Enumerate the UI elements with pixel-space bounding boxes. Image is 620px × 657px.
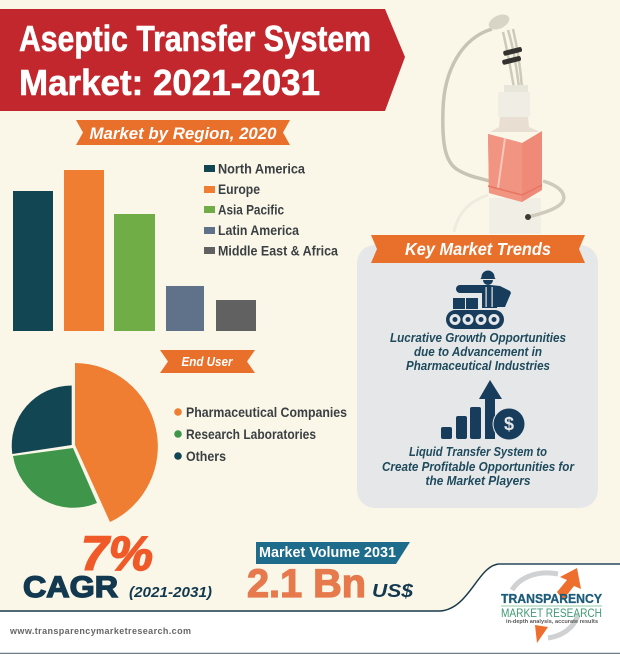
legend: end users: Pharmaceutical Companies [186, 404, 347, 420]
legend: regions: Latin America [218, 222, 299, 238]
bar chart: market by region [13, 170, 256, 331]
logo: transparency market research: TRANSPARENCY [501, 592, 603, 606]
text: trend one: Lucrative Growth Opportunities [390, 331, 566, 345]
text: trend two [382, 445, 575, 488]
market volume: Market Volume 2031 [259, 545, 396, 561]
footer white band [0, 564, 620, 657]
cagr value [23, 528, 212, 604]
panel: key market trends [357, 235, 598, 508]
title banner: Aseptic Transfer System [19, 18, 371, 59]
legend: regions: Europe [218, 181, 260, 197]
logo: transparency market research: in-depth analysis, accurate results [506, 619, 598, 625]
ribbon: key market trends: Key Market Trends [405, 239, 551, 259]
legend: end users: Research Laboratories [186, 426, 316, 442]
text: trend two: the Market Players [426, 474, 531, 488]
text: trend two: Create Profitable Opportunities for [382, 460, 575, 474]
logo: transparency market research: MARKET RESEARCH [501, 606, 602, 620]
legend: regions: North America [218, 160, 305, 176]
legend: end users [174, 404, 347, 464]
legend: regions: Middle East & Africa [218, 242, 338, 258]
text: trend two: Liquid Transfer System to [409, 445, 547, 459]
legend: regions [204, 160, 338, 258]
legend: end users: Others [186, 448, 226, 464]
cagr value: (2021-2031) [129, 584, 212, 601]
ribbon: market by region: Market by Region, 2020 [90, 124, 277, 143]
product image: aseptic bottle with tubing [443, 11, 564, 234]
icon: growth bars with dollar: $ [504, 414, 514, 434]
title banner: Market: 2021-2031 [19, 62, 320, 103]
market volume: US$ [372, 580, 414, 601]
cagr value: 7% [81, 528, 153, 581]
ribbon: end user [160, 350, 255, 373]
ribbon: key market trends [371, 235, 585, 263]
ribbon: end user: End User [182, 355, 234, 369]
icon: growth bars with dollar [441, 380, 526, 440]
cagr value: CAGR [23, 571, 118, 604]
ribbon: market by region [76, 120, 290, 145]
text: trend one: due to Advancement in [414, 345, 542, 359]
market volume: 2.1 Bn [247, 562, 366, 606]
website url: www.transparencymarketresearch.com [9, 626, 191, 636]
market volume [247, 542, 414, 606]
text: trend one: Pharmaceutical Industries [406, 359, 550, 373]
icon: conveyor with worker [446, 270, 511, 329]
pie chart: end user [12, 363, 158, 522]
title banner [0, 9, 405, 111]
logo: transparency market research [501, 568, 603, 643]
legend: regions: Asia Pacific [218, 202, 284, 218]
text: trend one [390, 331, 566, 373]
